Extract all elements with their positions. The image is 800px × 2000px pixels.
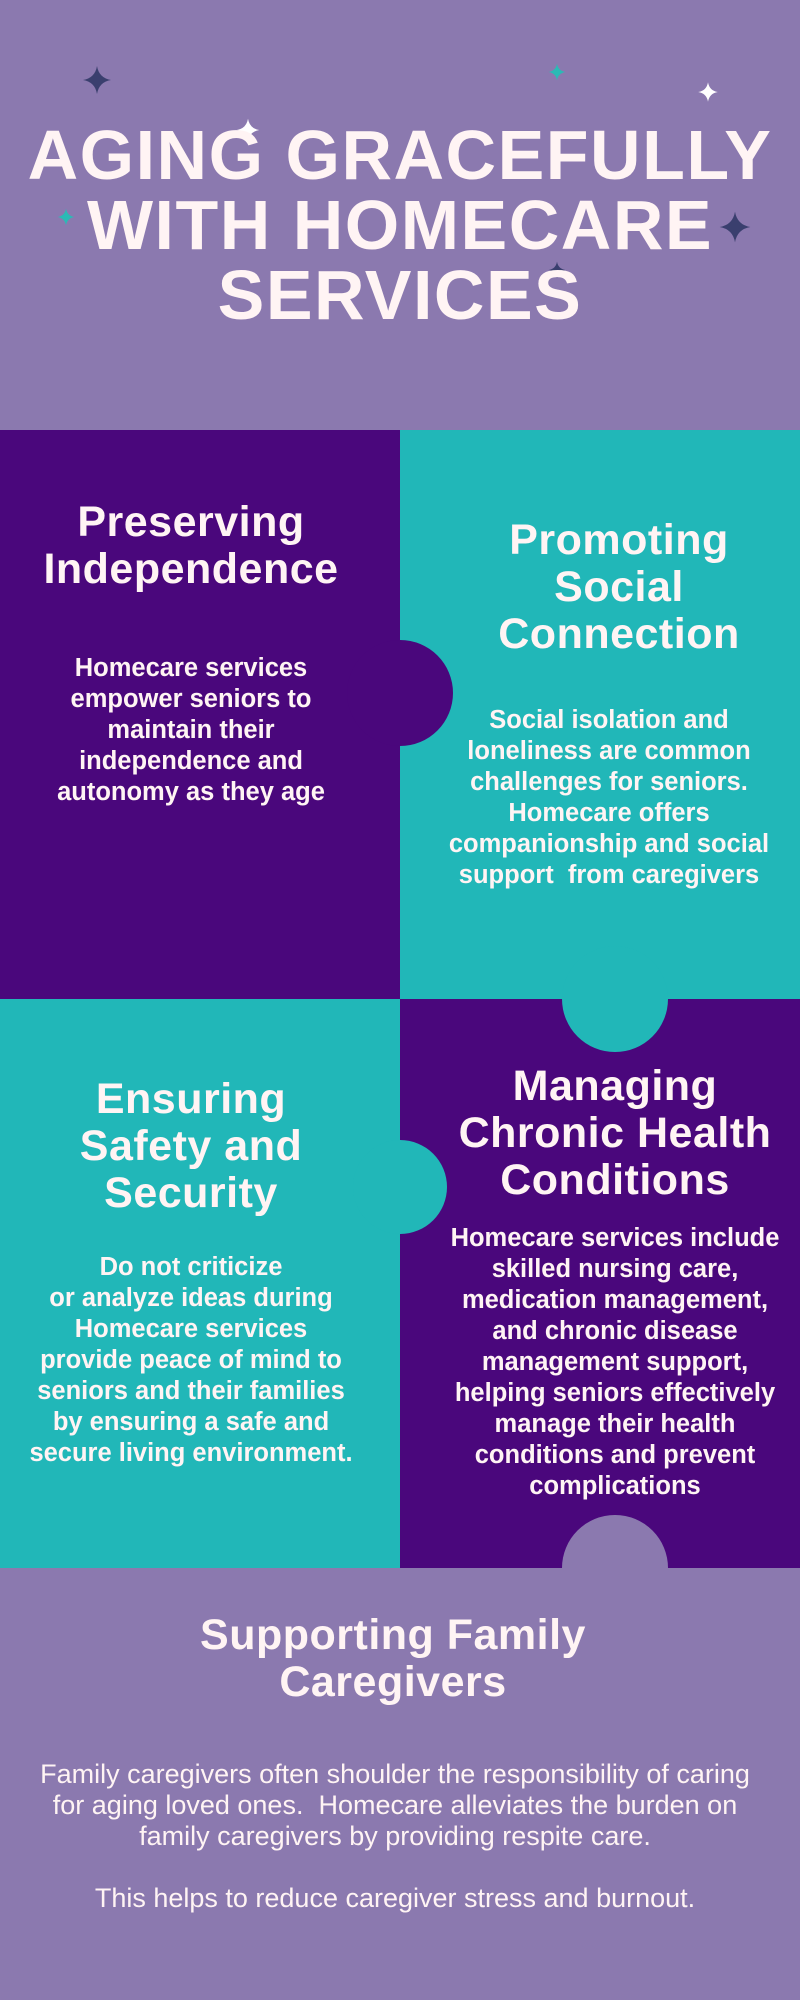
- body: or analyze ideas during: [49, 1284, 333, 1312]
- body: [29, 1253, 353, 1467]
- heading: Social: [554, 563, 684, 611]
- heading: Supporting Family: [200, 1611, 586, 1659]
- body: management support,: [482, 1348, 748, 1376]
- body: provide peace of mind to: [40, 1346, 342, 1374]
- body: autonomy as they age: [57, 778, 325, 806]
- heading: Security: [104, 1169, 278, 1217]
- panel: chronic health: [451, 1062, 779, 1500]
- heading: Ensuring: [96, 1075, 286, 1123]
- body: by ensuring a safe and: [53, 1408, 329, 1436]
- body: [57, 654, 325, 806]
- body: manage their health: [495, 1410, 735, 1438]
- heading: [459, 1062, 771, 1204]
- body: Homecare services include: [451, 1224, 779, 1252]
- heading: [80, 1075, 302, 1217]
- body: complications: [529, 1472, 701, 1500]
- panel: social connection: [449, 516, 769, 889]
- title: SERVICES: [218, 256, 582, 334]
- body: maintain their: [107, 716, 275, 744]
- heading: Conditions: [500, 1156, 730, 1204]
- heading: Chronic Health: [459, 1109, 771, 1157]
- body: Homecare offers: [508, 799, 710, 827]
- panel: family caregivers: [40, 1611, 750, 1913]
- heading: [498, 516, 740, 658]
- title: [28, 116, 772, 334]
- heading: Managing: [513, 1062, 717, 1110]
- body: medication management,: [462, 1286, 768, 1314]
- body: Family caregivers often shoulder the responsibility of caring: [40, 1759, 750, 1789]
- body: support from caregivers: [459, 861, 759, 889]
- body: [40, 1759, 750, 1913]
- body: independence and: [79, 747, 303, 775]
- body: loneliness are common: [467, 737, 751, 765]
- panel: preserving independence: [43, 498, 339, 806]
- body: companionship and social: [449, 830, 769, 858]
- heading: Independence: [43, 545, 339, 593]
- heading: Connection: [498, 610, 740, 658]
- body: seniors and their families: [37, 1377, 345, 1405]
- body: helping seniors effectively: [455, 1379, 775, 1407]
- body: and chronic disease: [492, 1317, 738, 1345]
- header background: [0, 0, 800, 430]
- body: for aging loved ones. Homecare alleviates the burden on: [53, 1790, 737, 1820]
- body: conditions and prevent: [475, 1441, 755, 1469]
- panel grid with puzzle knobs: [0, 430, 800, 1568]
- body: Do not criticize: [100, 1253, 282, 1281]
- body: empower seniors to: [71, 685, 311, 713]
- body: [451, 1224, 779, 1500]
- title: AGING GRACEFULLY: [28, 116, 772, 194]
- body: This helps to reduce caregiver stress and burnout.: [95, 1883, 695, 1913]
- heading: Promoting: [509, 516, 729, 564]
- panel: safety and security: [29, 1075, 353, 1467]
- heading: Safety and: [80, 1122, 302, 1170]
- body: family caregivers by providing respite care.: [139, 1821, 651, 1851]
- body: skilled nursing care,: [492, 1255, 738, 1283]
- body: Homecare services: [75, 1315, 307, 1343]
- body: secure living environment.: [29, 1439, 353, 1467]
- body: Social isolation and: [489, 706, 729, 734]
- heading: [200, 1611, 586, 1706]
- body: Homecare services: [75, 654, 307, 682]
- heading: Caregivers: [279, 1658, 507, 1706]
- body: [449, 706, 769, 889]
- title: WITH HOMECARE: [87, 186, 713, 264]
- heading: Preserving: [77, 498, 305, 546]
- decorative stars: [58, 64, 750, 278]
- body: challenges for seniors.: [470, 768, 748, 796]
- heading: [43, 498, 339, 593]
